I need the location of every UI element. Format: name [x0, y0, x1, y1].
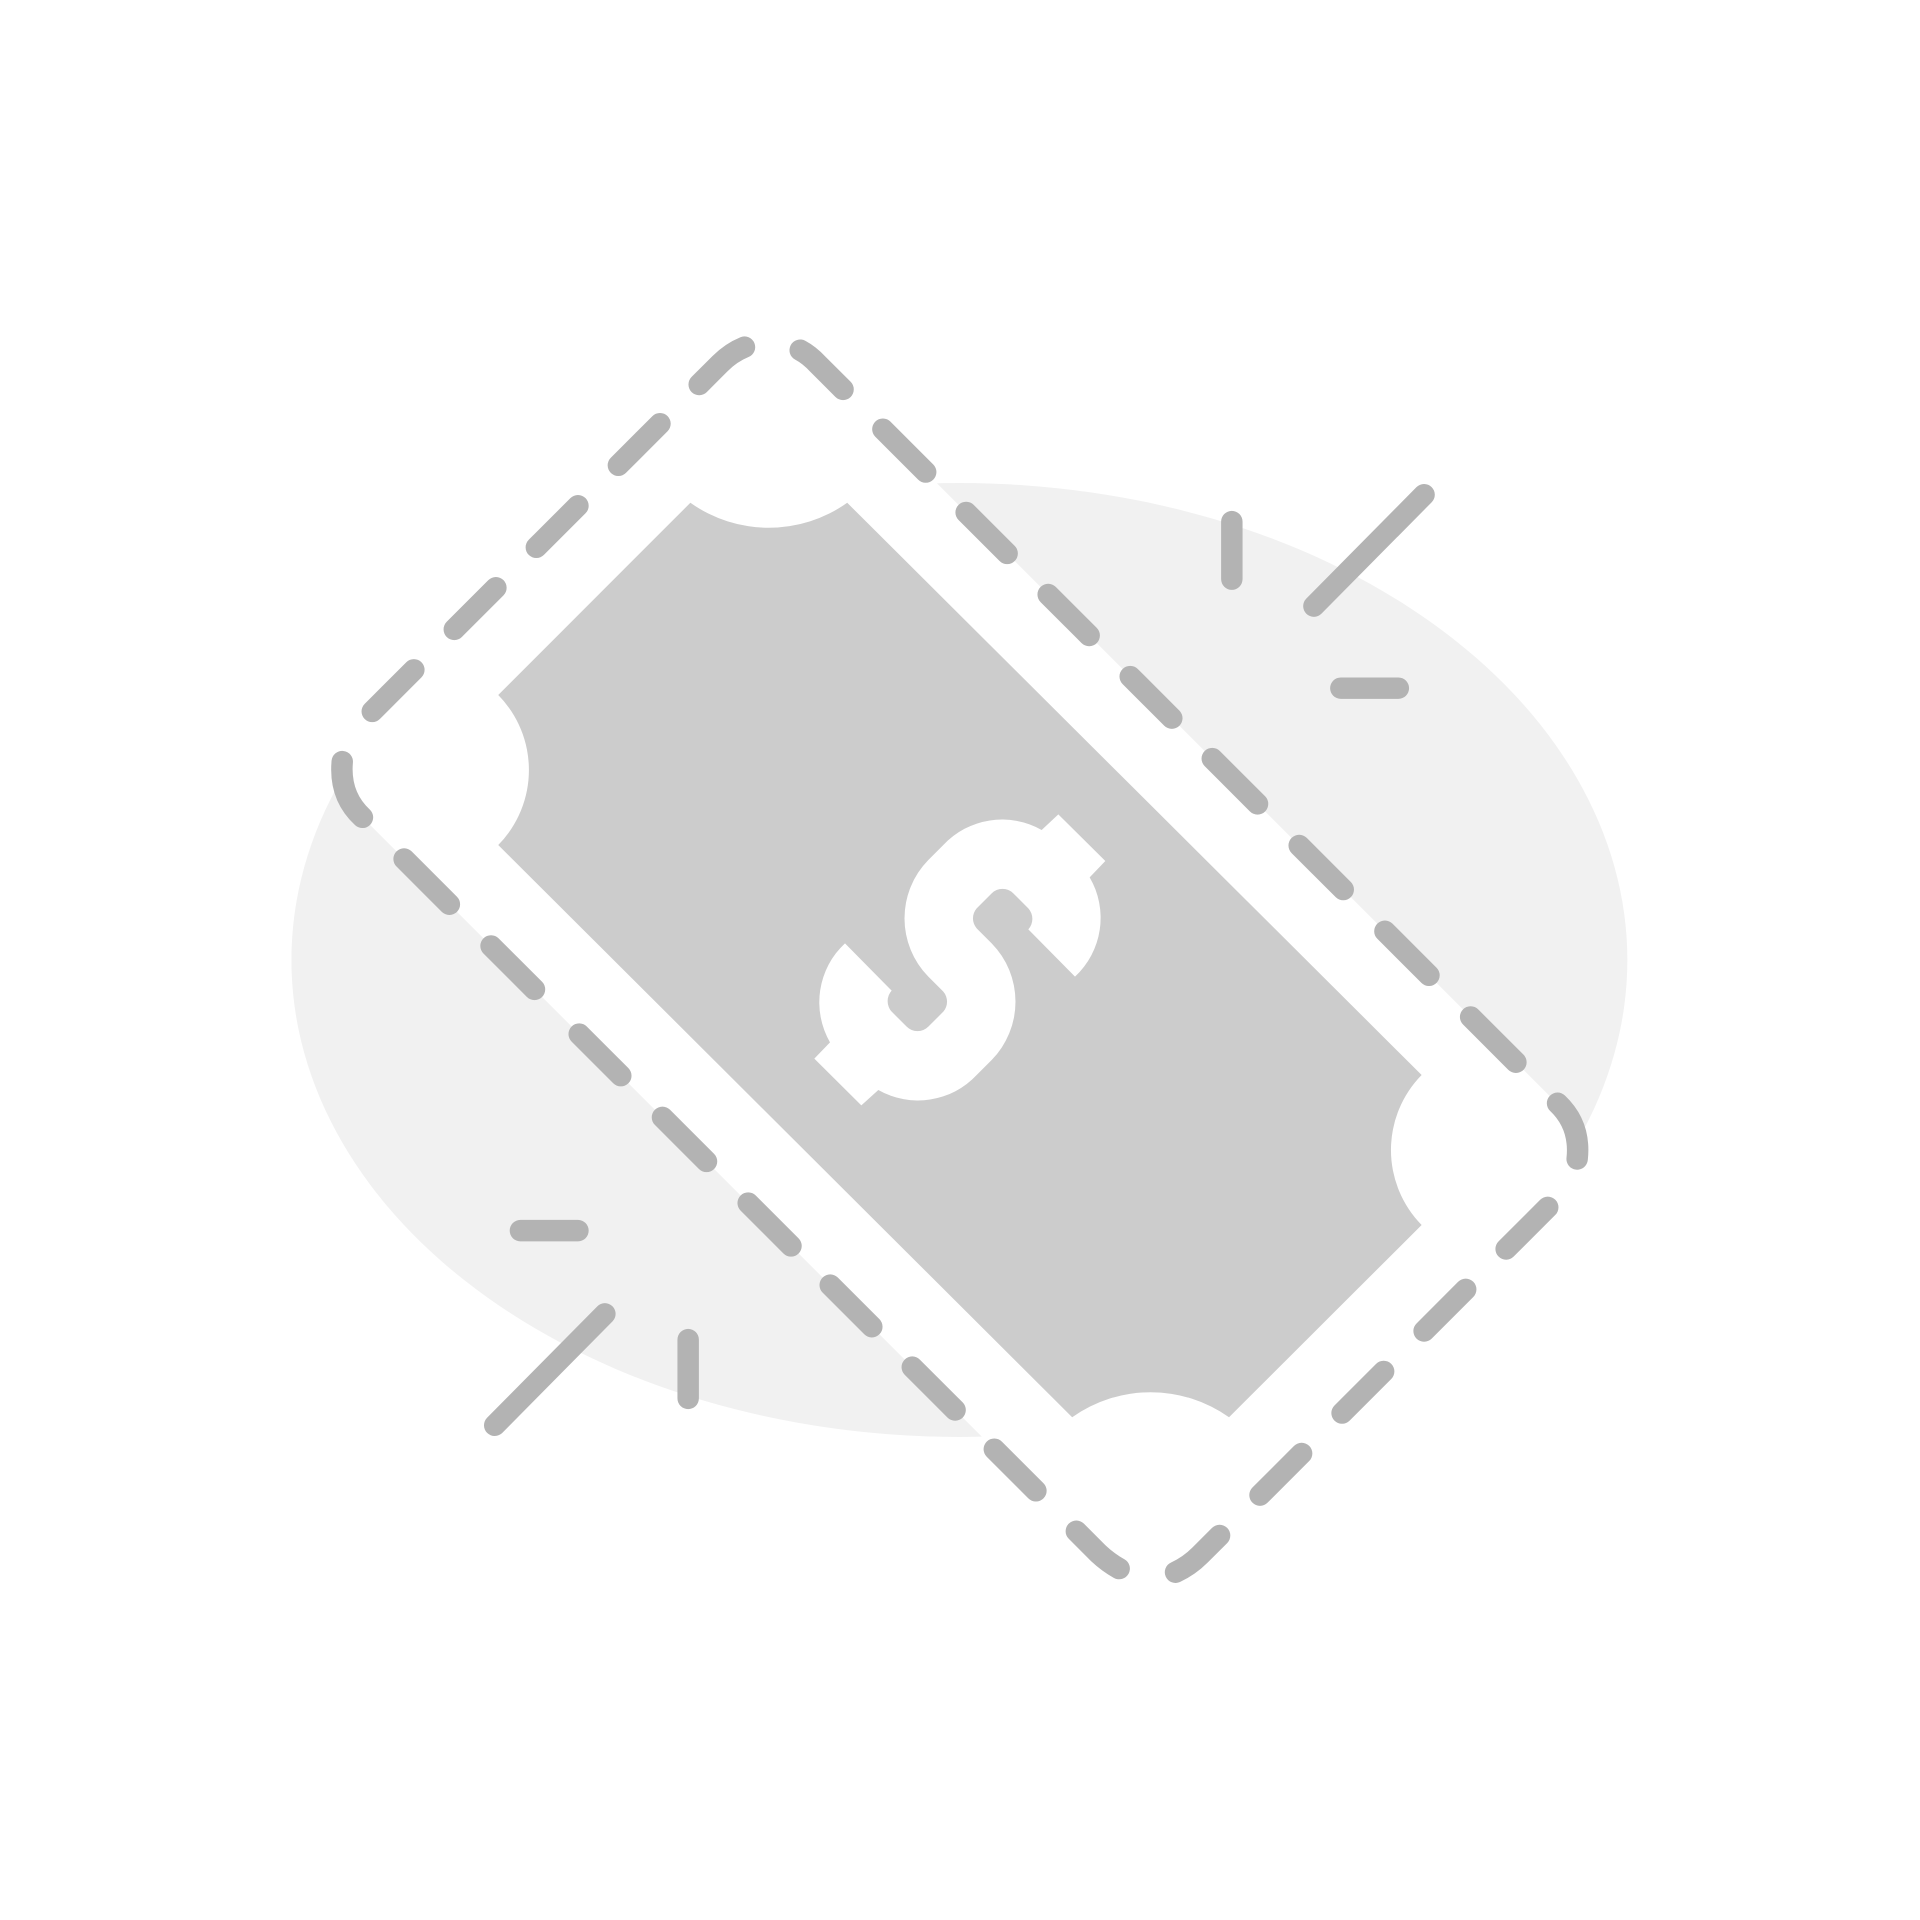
motion lines: lower left: [495, 1231, 688, 1425]
motion lines: upper right: [1232, 495, 1424, 688]
dashed outline: lower-left edge: [342, 762, 1119, 1569]
dashed outline: upper-right edge: [800, 350, 1578, 1159]
icon: dollar sign: [814, 814, 1105, 1105]
background ellipse: [291, 483, 1627, 1437]
dashed outline: upper-left edge: [372, 347, 744, 711]
banknote body: [498, 503, 1422, 1417]
dashed outline: lower-right edge: [1176, 1207, 1548, 1572]
white bill backing: [342, 340, 1578, 1579]
